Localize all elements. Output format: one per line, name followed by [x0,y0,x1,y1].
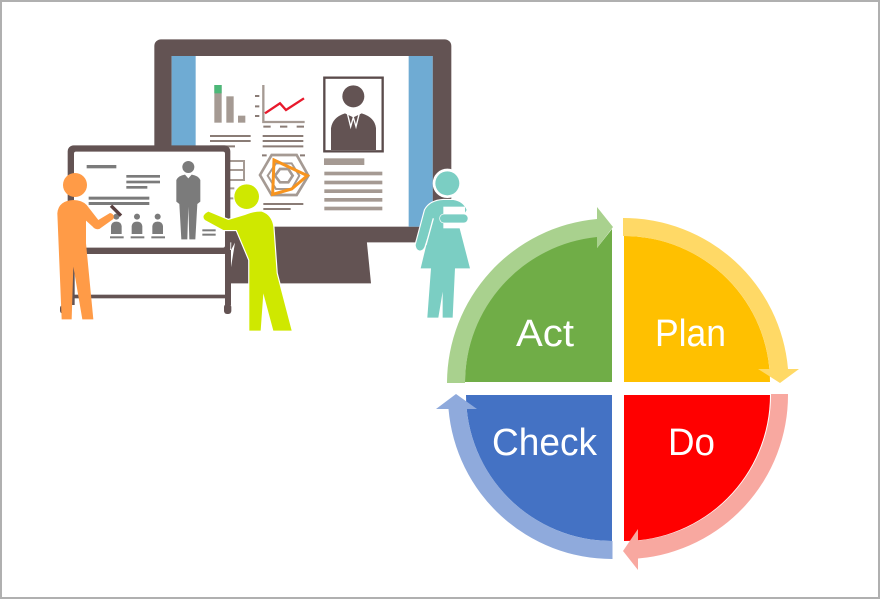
quadrant: Plan: Plan [655,313,726,355]
text lines [210,136,305,209]
arrow: Check to Act [436,394,612,559]
profile text [324,158,382,210]
quadrant: Check [436,394,612,559]
quadrant: Do [623,394,788,570]
quadrant: Check: Check [492,422,598,464]
figure: teal person [416,171,470,318]
arrow: Act to Plan [447,207,613,383]
line chart [255,85,305,127]
monitor [154,39,451,283]
radar chart [260,155,308,195]
quadrant: Act [447,207,613,383]
whiteboard content [87,161,216,239]
illustration: team at monitor and whiteboard [57,39,470,331]
figure: orange person [57,173,121,319]
quadrant: Plan [623,218,799,383]
arrow: Plan to Do [623,218,799,383]
quadrant: Do: Do [668,422,715,464]
table [230,161,244,198]
whiteboard [60,145,231,314]
portrait [324,78,383,151]
PDCA cycle diagram [436,207,799,570]
figure: lime person [203,184,292,331]
quadrant: Act: Act [516,313,574,355]
bar chart [214,85,245,123]
arrow: Do to Check [623,394,788,570]
